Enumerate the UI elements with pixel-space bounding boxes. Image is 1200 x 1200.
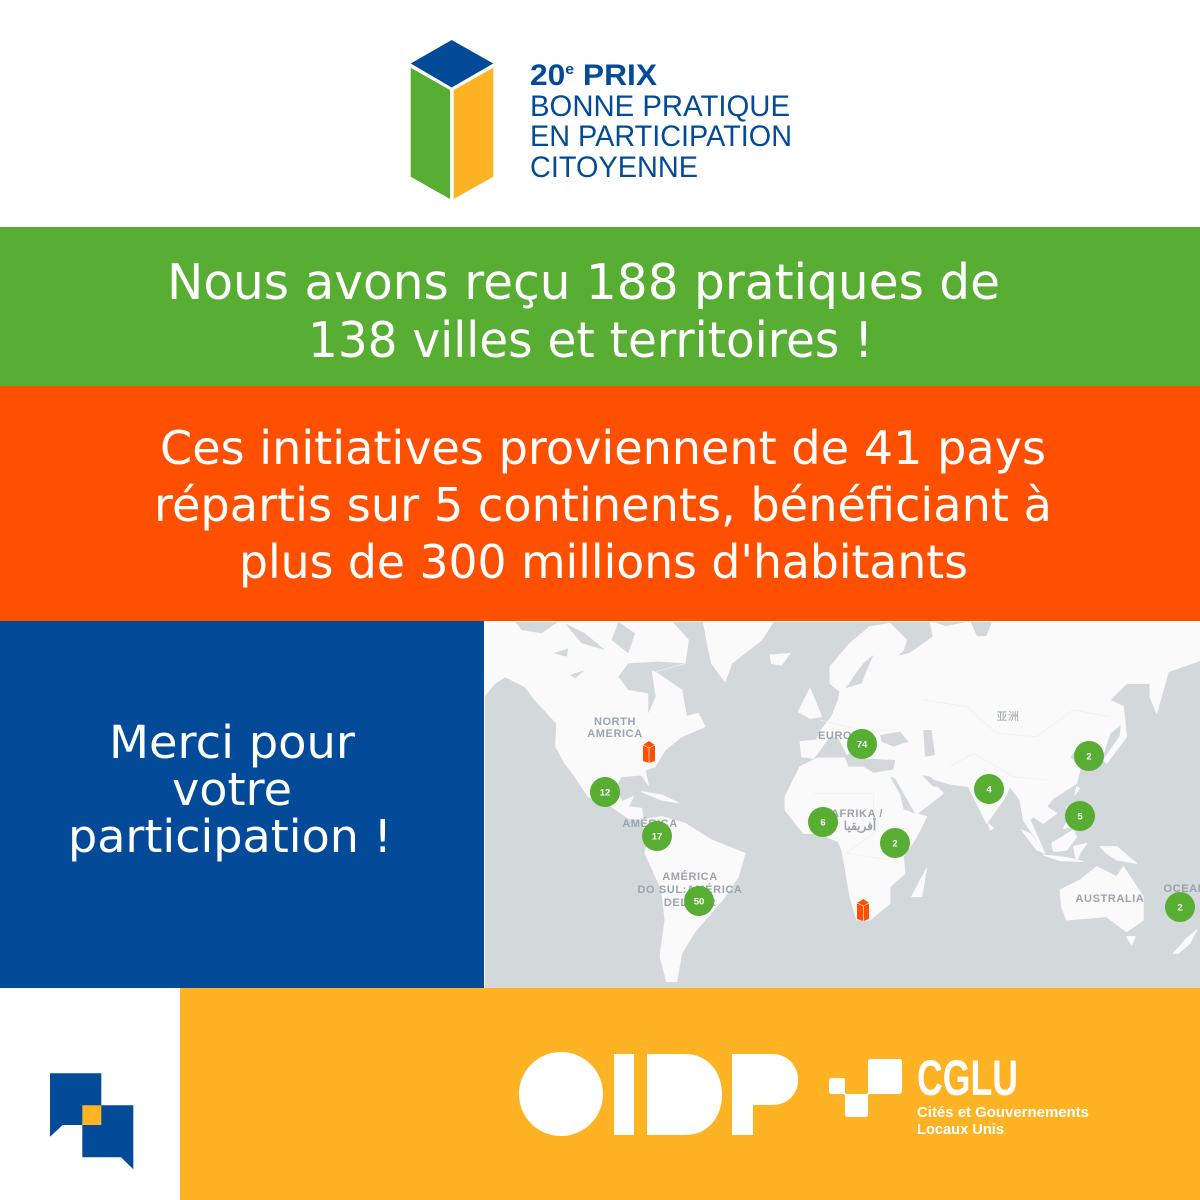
map labels: NORTH	[594, 716, 636, 728]
map cluster markers: 2	[1177, 902, 1183, 914]
map labels: AMERICA	[587, 728, 643, 740]
logo text: e	[565, 61, 574, 78]
logo: CGLU: CGLU	[917, 1050, 1018, 1106]
map land: Americas	[485, 622, 790, 982]
panel: world map	[485, 620, 1200, 988]
logo text: PRIX	[574, 59, 657, 92]
map labels: AMÉRICA	[662, 870, 718, 883]
map icon: orange cube USA	[643, 741, 655, 763]
map cluster markers: 2	[1086, 752, 1092, 762]
banner heading: practices received	[167, 254, 1000, 369]
map cluster markers: 50	[694, 896, 704, 908]
panel: orange banner	[0, 386, 1200, 621]
banner text: countries and inhabitants: répartis sur 5 continents, bénéficiant à	[154, 478, 1052, 532]
map labels: AFRIKA /	[831, 808, 883, 820]
logo text: BONNE PRATIQUE	[530, 90, 790, 123]
panel: green banner	[0, 227, 1200, 386]
map cluster markers	[590, 729, 1195, 922]
map labels: AUSTRALIA	[1076, 893, 1144, 905]
map labels: DEL SUR	[664, 897, 716, 909]
map labels: أفريقيا	[844, 818, 876, 834]
map labels: EUROPE	[818, 730, 868, 742]
map cluster markers: 5	[1077, 812, 1083, 822]
banner text: countries and inhabitants: plus de 300 millions d'habitants	[239, 535, 968, 589]
map labels: 亚洲	[996, 711, 1020, 723]
logo text	[530, 59, 792, 184]
thank-you text	[68, 716, 392, 863]
map cluster markers: 2	[892, 838, 898, 850]
map labels	[587, 711, 1200, 909]
logo: CGLU	[829, 1050, 1089, 1138]
banner heading: practices received: Nous avons reçu 188 pratiques de	[167, 254, 1000, 311]
thank-you text: votre	[172, 763, 292, 816]
panel: yellow footer	[180, 988, 1200, 1200]
logo: 20e Prix	[411, 40, 792, 199]
map cluster markers: 12	[600, 788, 610, 798]
map land: Europe, Africa, Asia, Oceania	[785, 620, 1200, 953]
map cluster markers: 74	[857, 740, 868, 750]
thank-you text: participation !	[68, 810, 392, 863]
logo: OIDP	[519, 1052, 798, 1136]
logo: CGLU: Cités et Gouvernements	[917, 1104, 1089, 1121]
map labels: DO SUL:AMÉRICA	[638, 883, 742, 896]
map icon: orange cube South Africa	[857, 899, 869, 921]
logo text: EN PARTICIPATION	[530, 120, 792, 153]
icon: cube	[411, 40, 493, 199]
banner text: countries and inhabitants	[154, 421, 1052, 589]
banner heading: practices received: 138 villes et territoires !	[308, 312, 873, 369]
thank-you text: Merci pour	[109, 716, 355, 769]
banner text: countries and inhabitants: Ces initiatives proviennent de 41 pays	[160, 421, 1046, 475]
map labels: AMÉRICA	[622, 817, 678, 830]
panel: blue thank-you	[0, 621, 484, 988]
map cluster markers: 17	[652, 832, 662, 842]
logo text: 20	[530, 59, 563, 92]
icon: speech bubbles	[50, 1073, 133, 1169]
map cluster markers: 6	[820, 818, 826, 828]
map cluster markers: 4	[986, 784, 992, 796]
logo text: CITOYENNE	[530, 151, 698, 184]
logo: CGLU: Locaux Unis	[917, 1121, 1004, 1138]
